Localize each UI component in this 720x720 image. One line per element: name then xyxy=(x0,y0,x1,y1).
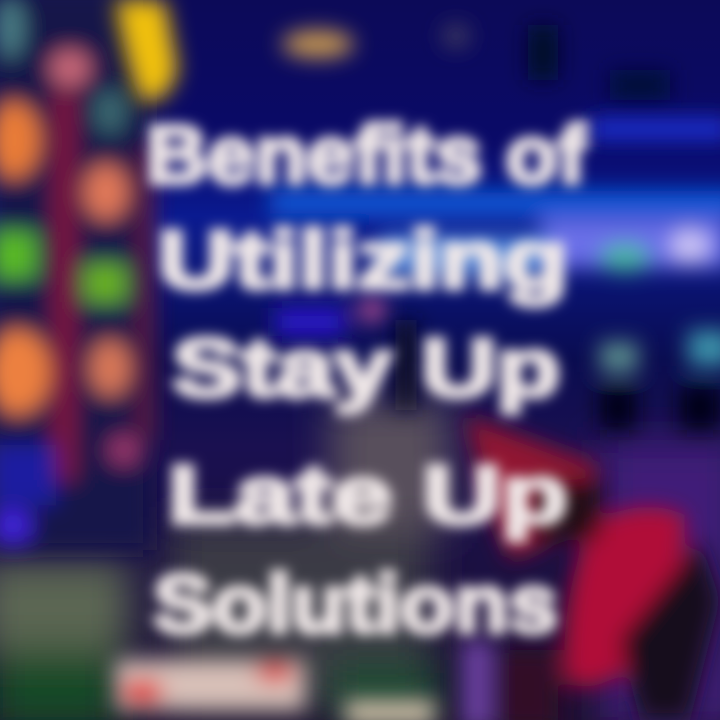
neon band xyxy=(270,118,720,336)
title line: Late Up: Late Up xyxy=(168,448,568,541)
title line: Utilizing: Utilizing xyxy=(158,213,568,306)
red chair xyxy=(395,320,720,720)
yellow banner xyxy=(115,0,178,102)
floor and lower scene xyxy=(0,400,720,720)
bottom red and white sign xyxy=(115,660,435,720)
title line: Stay Up: Stay Up xyxy=(172,321,560,414)
right side screens xyxy=(600,330,720,430)
title xyxy=(146,108,586,650)
ceiling lights xyxy=(282,24,670,100)
title line: Solutions: Solutions xyxy=(153,557,558,650)
title line: Benefits of: Benefits of xyxy=(146,108,586,201)
left shelving column xyxy=(0,0,154,550)
